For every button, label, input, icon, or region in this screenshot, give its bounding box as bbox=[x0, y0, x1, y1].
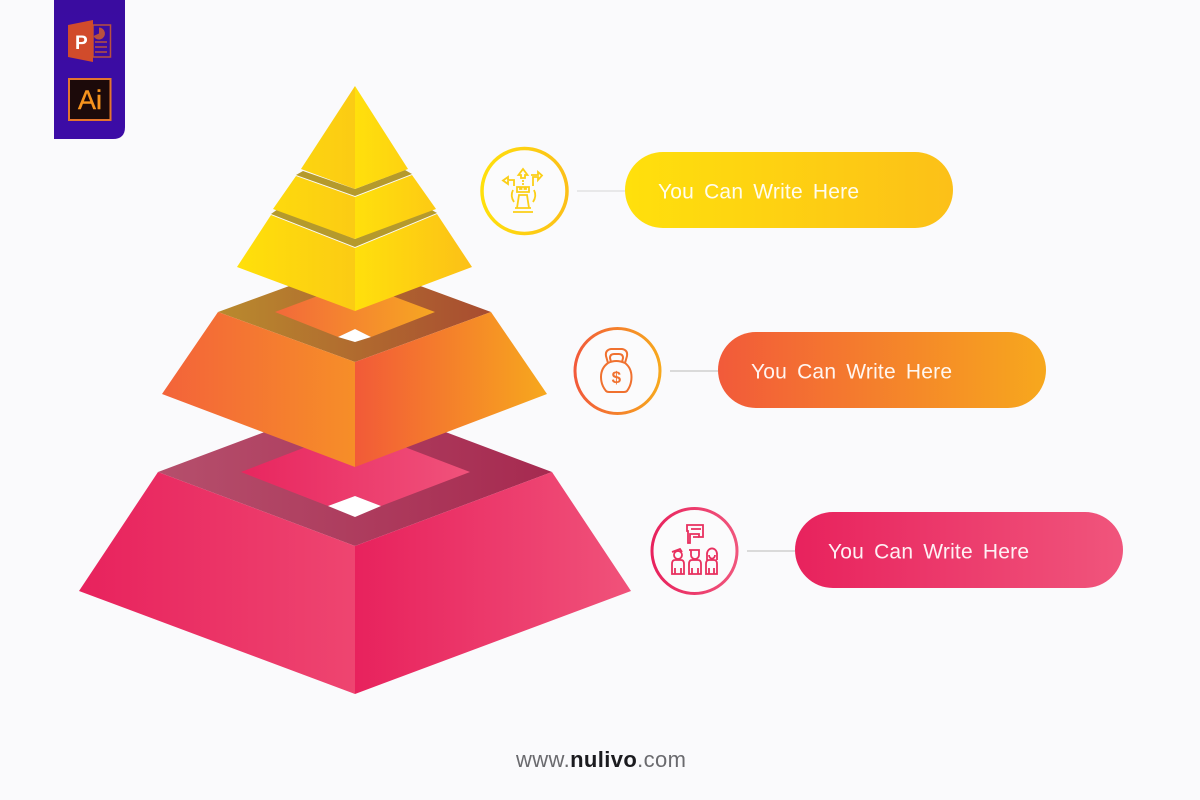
icon: Illustrator: Ai bbox=[78, 85, 102, 115]
footer website address: www.nulivo.com bbox=[515, 747, 686, 772]
yellow base left face bbox=[237, 215, 355, 311]
yellow band 2 bbox=[271, 209, 437, 247]
icon circle: pink bbox=[652, 508, 737, 594]
icon: kettlebell with dollar bbox=[601, 349, 632, 392]
orange right face bbox=[355, 312, 547, 467]
pill 2 bbox=[718, 332, 1046, 408]
icon: chess tower with arrows bbox=[503, 169, 542, 212]
connector 1 bbox=[577, 190, 625, 192]
yellow apex left face bbox=[301, 86, 355, 189]
yellow middle right face bbox=[355, 175, 436, 239]
pill 3 label: You Can Write Here bbox=[828, 540, 1029, 564]
connector 2 bbox=[670, 370, 718, 372]
software badge panel bbox=[54, 0, 125, 139]
pill 2 label: You Can Write Here bbox=[751, 360, 952, 384]
icon circle: yellow bbox=[482, 148, 567, 234]
orange left face bbox=[162, 312, 355, 467]
icon: kettlebell with dollar: $ bbox=[612, 368, 622, 387]
pyramid: middle tier (orange) bbox=[162, 262, 547, 467]
pill 3 bbox=[795, 512, 1123, 588]
pill 1 label: You Can Write Here bbox=[658, 180, 859, 204]
white gap in orange tier bbox=[338, 329, 371, 342]
yellow middle left face bbox=[273, 176, 355, 239]
row 1: yellow item bbox=[482, 148, 953, 234]
top ring of pink tier bbox=[158, 398, 552, 546]
yellow band 1 bbox=[296, 170, 412, 196]
pyramid: top tier (yellow) bbox=[237, 86, 472, 311]
icon: PowerPoint: P bbox=[75, 33, 88, 54]
pink right face bbox=[355, 472, 631, 694]
top ring of orange tier bbox=[218, 262, 491, 362]
icon: team with paint roller bbox=[672, 525, 717, 574]
pill 1 bbox=[625, 152, 953, 228]
row 3: pink item bbox=[652, 508, 1123, 594]
connector 3 bbox=[747, 550, 795, 552]
inner opening of orange tier bbox=[275, 282, 435, 337]
pink left face bbox=[79, 472, 355, 694]
row 2: orange item bbox=[575, 328, 1046, 414]
inner opening of pink tier bbox=[241, 428, 470, 506]
pyramid: bottom tier (pink) bbox=[79, 398, 631, 694]
yellow apex right face bbox=[355, 86, 408, 189]
icon circle: orange bbox=[575, 328, 660, 414]
white gap in pink tier bbox=[328, 496, 381, 517]
yellow base right face bbox=[355, 214, 472, 311]
